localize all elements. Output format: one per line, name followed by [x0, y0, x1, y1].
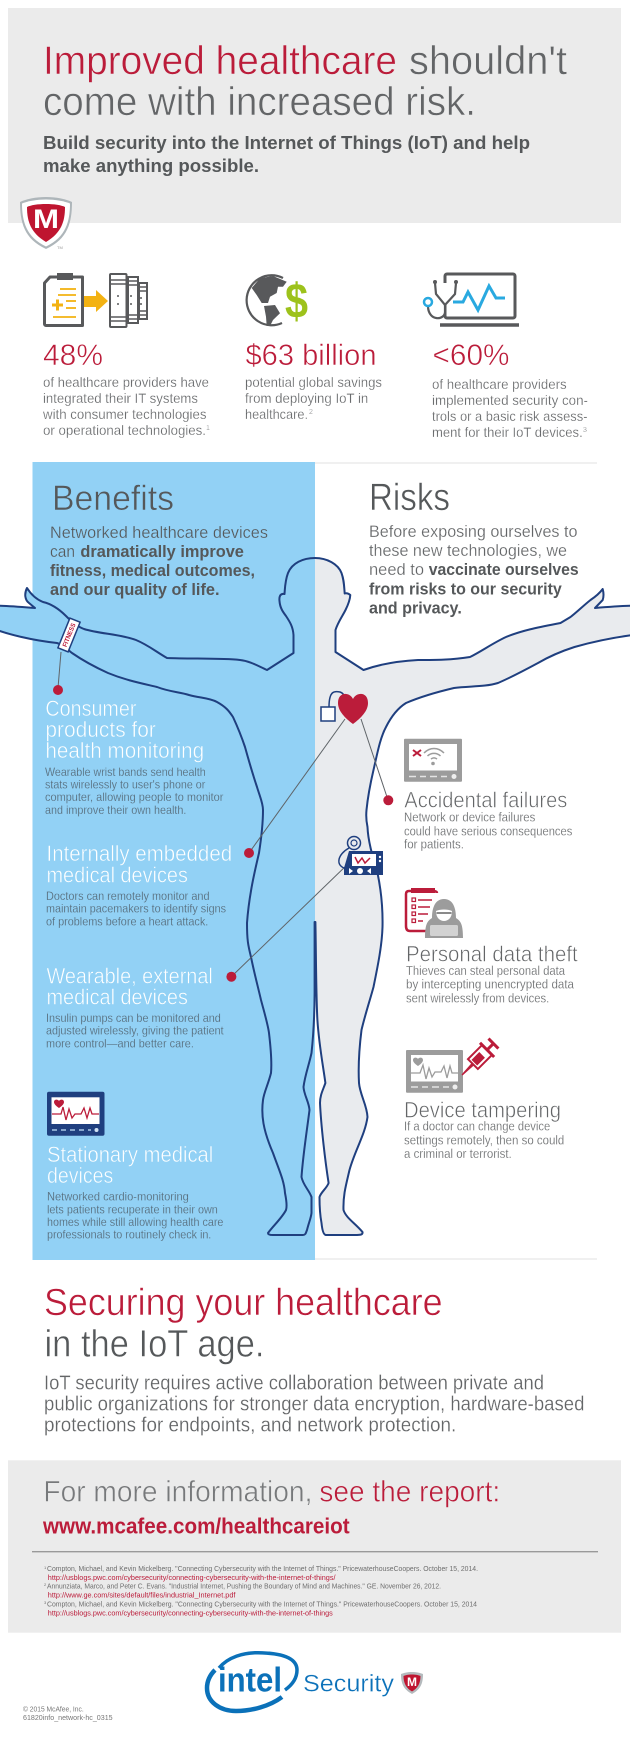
intro text: and our quality of life. — [50, 580, 220, 599]
icon: laptop and stethoscope — [424, 274, 519, 325]
icon: globe and dollar — [247, 275, 308, 329]
logo: Intel Security — [207, 1653, 423, 1711]
copyright: 61820info_network-hc_0315 — [23, 1713, 113, 1722]
description: potential global savings — [245, 374, 382, 390]
description: 1 — [206, 425, 210, 432]
paragraph — [44, 1372, 584, 1436]
call to action: see the report: — [319, 1476, 500, 1509]
item: wearable external: medical devices — [46, 984, 188, 1009]
item: device tampering: a criminal or terrorist. — [404, 1147, 512, 1161]
intro text: can — [50, 542, 75, 561]
intro text: from risks to our security — [369, 579, 562, 598]
panel: risks — [369, 477, 579, 1161]
description: 2 — [309, 409, 313, 416]
description: of healthcare providers have — [43, 374, 209, 390]
icon: clipboard to servers — [44, 273, 147, 327]
item: stationary devices — [47, 1142, 224, 1242]
intro text — [369, 522, 579, 617]
item: internally embedded — [46, 841, 232, 928]
item: stationary devices: lets patients recuperate in their own — [47, 1202, 218, 1216]
call to action: For more information, — [43, 1476, 312, 1509]
intro text: vaccinate ourselves — [429, 560, 579, 579]
item: personal data theft: Thieves can steal personal data — [406, 964, 565, 978]
item: accidental failures: could have serious consequences — [404, 824, 572, 838]
description: 3 — [583, 427, 587, 434]
section: securing your healthcare — [44, 1282, 584, 1436]
icon: stationary monitor — [47, 1092, 104, 1136]
description: or operational technologies. — [43, 422, 206, 438]
icon: fitness wristband: FITNESS — [62, 622, 78, 648]
item: internally embedded: of problems before a heart attack. — [46, 914, 208, 928]
description: healthcare. — [245, 406, 308, 422]
paragraph: IoT security requires active collaboration between private and — [44, 1372, 544, 1394]
statistic: $63 billion — [246, 339, 376, 372]
title: shouldn't — [409, 39, 567, 83]
subtitle: Build security into the Internet of Things (IoT) and help — [43, 133, 530, 153]
logo: Intel Security: Security — [303, 1671, 394, 1698]
item: stationary devices: professionals to routinely check in. — [47, 1228, 211, 1242]
intro text: and privacy. — [369, 598, 462, 617]
footnotes — [44, 1564, 478, 1617]
icon: McAfee shield — [20, 197, 72, 250]
panel: stat 48 percent — [42, 273, 210, 438]
item: consumer products: computer, allowing people to monitor — [45, 790, 223, 804]
icon: monitor with failed wifi — [404, 739, 462, 782]
footnotes: http://www.ge.com/sites/default/files/industrial_Internet.pdf — [48, 1590, 236, 1599]
footnotes: Compton, Michael, and Kevin Mickelberg. "Connecting Cybersecurity with the Internet of Things." PricewaterhouseCoopers. October 15, 2014. — [47, 1564, 478, 1573]
item: wearable external — [46, 963, 224, 1050]
item: personal data theft: by intercepting unencrypted data — [406, 978, 574, 992]
item: stationary devices: Networked cardio-monitoring — [47, 1190, 189, 1204]
icon: globe and dollar: $ — [285, 275, 308, 329]
description: of healthcare providers — [432, 376, 567, 392]
item: consumer products: Consumer — [45, 696, 136, 721]
intro text: dramatically improve — [80, 542, 244, 561]
icon: small McAfee shield — [401, 1672, 423, 1694]
item: accidental failures: Network or device failures — [404, 810, 535, 824]
icon: fitness wristband — [58, 618, 80, 652]
item: device tampering: Device tampering — [404, 1097, 561, 1122]
icon: insulin pump — [339, 836, 383, 875]
item: device tampering — [404, 1097, 564, 1161]
panel: benefits background — [32, 462, 315, 1260]
item: internally embedded: maintain pacemakers to identify signs — [46, 902, 226, 916]
subtitle — [43, 133, 530, 176]
description: ment for their IoT devices. — [432, 424, 583, 440]
intro text: Before exposing ourselves to — [369, 522, 578, 541]
item: device tampering: If a doctor can change device — [404, 1120, 550, 1134]
title — [43, 39, 567, 124]
item: consumer products: products for — [45, 717, 156, 742]
description — [245, 374, 382, 422]
item: accidental failures — [404, 787, 572, 852]
item: stationary devices: devices — [47, 1163, 113, 1188]
footnotes: http://usblogs.pwc.com/cybersecurity/connecting-cybersecurity-with-the-internet-of-things/ — [48, 1573, 336, 1582]
intro text: these new technologies, we — [369, 541, 567, 560]
item: wearable external: adjusted wirelessly, giving the patient — [46, 1024, 224, 1038]
icon: heart and pacemaker — [321, 692, 368, 724]
callout lines and dots — [53, 652, 393, 982]
description — [42, 374, 210, 438]
item: consumer products: health monitoring — [45, 738, 204, 763]
item: internally embedded: Doctors can remotely monitor and — [46, 889, 210, 903]
heading: in the IoT age. — [44, 1324, 264, 1366]
item: internally embedded: medical devices — [46, 862, 188, 888]
icon: clipboard and hacker — [406, 888, 463, 938]
item: wearable external: Wearable, external — [46, 963, 213, 988]
item: wearable external: more control—and better care. — [46, 1036, 194, 1050]
subtitle: make anything possible. — [43, 156, 259, 176]
item: stationary devices: homes while still allowing health care — [47, 1215, 224, 1229]
item: internally embedded: Internally embedded — [46, 841, 232, 866]
panel: header — [8, 8, 621, 223]
footnotes: http://usblogs.pwc.com/cybersecurity/connecting-cybersecurity-with-the-internet-of-things — [48, 1608, 333, 1617]
url: www.mcafee.com/healthcareiot — [42, 1513, 350, 1538]
paragraph: protections for endpoints, and network protection. — [44, 1414, 456, 1436]
footnotes: Annunziata, Marco, and Peter C. Evans. "Industrial Internet, Pushing the Boundary of Mind and Machines." GE. November 26, 2012. — [47, 1581, 441, 1590]
description: integrated their IT systems — [43, 390, 198, 406]
icon: small McAfee shield: M — [407, 1675, 417, 1689]
copyright — [23, 1705, 113, 1722]
item: consumer products — [45, 696, 223, 817]
panel: benefits — [45, 479, 268, 1242]
icon: McAfee shield: TM — [57, 245, 63, 250]
heading — [44, 1282, 443, 1366]
icon: monitor and syringe — [406, 1036, 501, 1093]
panel: more information — [8, 1460, 621, 1633]
item: device tampering: settings remotely, then so could — [404, 1133, 564, 1147]
intro text: fitness, medical outcomes, — [50, 561, 255, 580]
item: personal data theft: Personal data theft — [406, 942, 578, 967]
item: personal data theft — [406, 942, 578, 1005]
item: accidental failures: for patients. — [404, 838, 464, 852]
human body figure — [0, 558, 630, 1235]
description — [432, 376, 588, 440]
description: with consumer technologies — [42, 406, 206, 422]
item: personal data theft: sent wirelessly from devices. — [406, 991, 549, 1005]
logo: Intel Security: intel — [218, 1662, 282, 1700]
footnotes: 2 — [44, 1582, 47, 1587]
intro text: Networked healthcare devices — [50, 523, 268, 542]
footnotes: 1 — [44, 1565, 47, 1570]
call to action — [43, 1476, 500, 1509]
description: trols or a basic risk assess- — [432, 408, 588, 424]
description: implemented security con- — [432, 392, 588, 408]
copyright: © 2015 McAfee, Inc. — [23, 1705, 84, 1714]
item: accidental failures: Accidental failures — [404, 787, 567, 812]
title: Improved healthcare — [43, 39, 397, 83]
paragraph: public organizations for stronger data encryption, hardware-based — [44, 1393, 584, 1415]
panel: stat 63 billion — [245, 275, 382, 422]
title: come with increased risk. — [43, 80, 476, 124]
footnotes: Compton, Michael, and Kevin Mickelberg. "Connecting Cybersecurity with the Internet of Things." PricewaterhouseCoopers. October 15, 2014 — [47, 1599, 477, 1608]
item: wearable external: Insulin pumps can be monitored and — [46, 1011, 221, 1025]
icon: McAfee shield: M — [33, 204, 59, 234]
intro text: need to — [369, 560, 424, 579]
statistic: 48% — [43, 339, 103, 372]
panel: stat 60 percent — [424, 274, 588, 440]
intro text — [50, 523, 268, 599]
item: consumer products: stats wirelessly to user's phone or — [45, 778, 205, 792]
heading: Benefits — [52, 479, 174, 518]
item: consumer products: and improve their own health. — [45, 803, 186, 817]
footnotes: 3 — [44, 1600, 47, 1605]
item: consumer products: Wearable wrist bands send health — [45, 765, 206, 779]
heading: Securing your healthcare — [44, 1282, 443, 1324]
item: stationary devices: Stationary medical — [47, 1142, 213, 1167]
description: from deploying IoT in — [245, 390, 368, 406]
heading: Risks — [369, 477, 450, 519]
statistic: <60% — [432, 339, 510, 372]
